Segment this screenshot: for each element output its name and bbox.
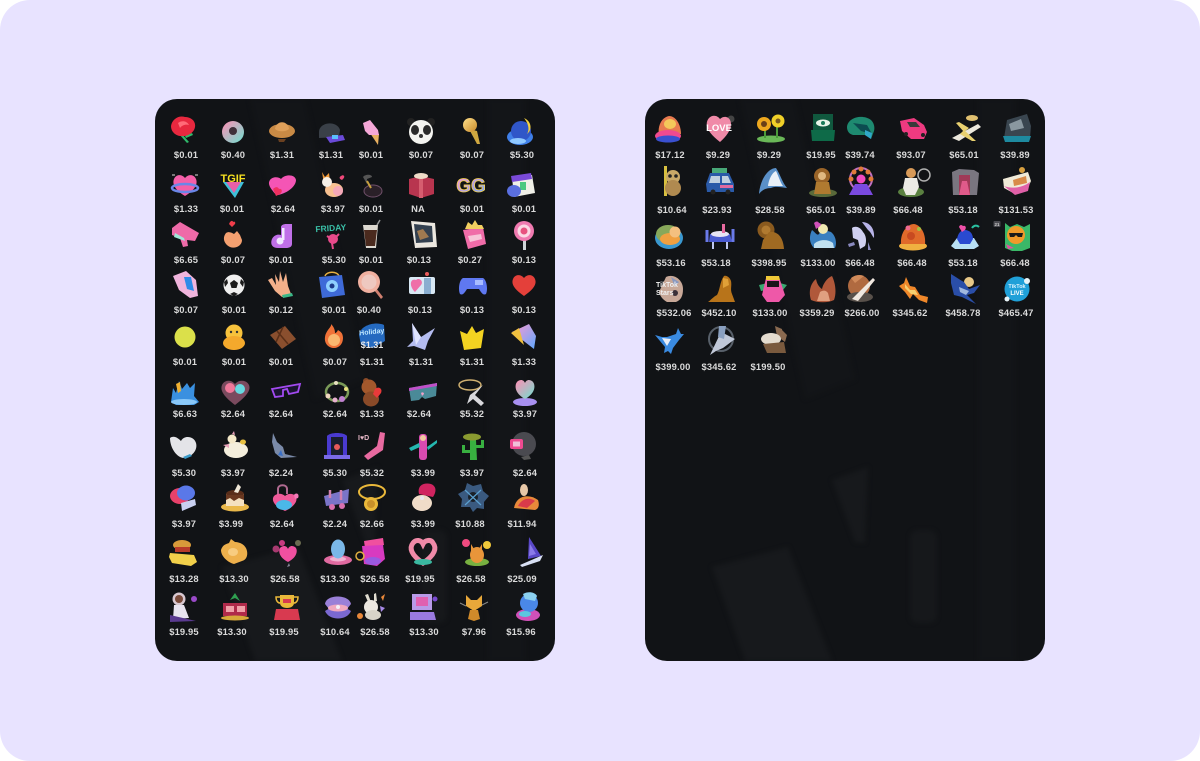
gift: dark island: $39.89 (1000, 149, 1030, 160)
gift: green cactus (451, 430, 495, 479)
gift: TGIF sticker (220, 173, 246, 214)
gift: clam shell: $10.64 (320, 626, 350, 637)
gift: GG letters (456, 176, 486, 214)
gift: white whale: $28.58 (755, 204, 785, 215)
gift: globe pedestal: $13.30 (320, 573, 350, 584)
gift: Holiday sticker with price overlay: $1.31 (361, 340, 383, 350)
gift: TikTok Live globe: LIVE (1010, 291, 1024, 297)
gift: stone gate: $53.18 (948, 204, 978, 215)
gift: dark island (995, 112, 1039, 161)
gift: lion man (801, 166, 845, 216)
gift: yellow chick (222, 324, 246, 367)
gift: pink phone with text (351, 430, 395, 479)
gift: blue figure: $15.96 (506, 626, 536, 637)
gift: flame (323, 324, 347, 367)
gift: purple sailboat (507, 536, 551, 585)
gift: corgi in pool: $53.16 (656, 257, 686, 268)
gift: chocolate (269, 326, 296, 367)
gift: teal helmet (839, 112, 883, 161)
gift: blue speaker: $0.01 (322, 304, 346, 315)
gift: girl on orange float (504, 482, 548, 530)
gift: blue crown flames: $6.63 (173, 408, 197, 419)
gift: sunflowers: $9.29 (757, 149, 781, 160)
gift: girl on orange float: $11.94 (507, 518, 537, 529)
gift: sun with sunglasses and level badge: $66.48 (1000, 257, 1030, 268)
gift: dining table: $53.18 (701, 257, 731, 268)
gift: Love heart (698, 112, 742, 161)
gift: white duck: $3.97 (221, 467, 245, 478)
gift: red trophy: $19.95 (269, 626, 299, 637)
gift: sweet boat (995, 166, 1039, 216)
gift: island with heart (943, 220, 987, 269)
gift: pink phone with text: $5.32 (360, 467, 384, 478)
gift: music note badge: $0.01 (269, 254, 293, 265)
gift: pink inflatable man: $3.99 (411, 467, 435, 478)
gift: manta bird (261, 430, 305, 479)
gift: TikTok Stars skull: $532.06 (657, 307, 691, 318)
gift: orange flower bed (891, 220, 935, 269)
gift: flower wreath (315, 376, 359, 420)
gift: ferris wheel (839, 166, 883, 216)
gift: pink love hearts: $2.64 (271, 203, 295, 214)
gift: airplane (944, 112, 988, 161)
gift: pink phone with text: I♥D (358, 435, 369, 442)
gift: heart on pedestal: $3.97 (513, 408, 537, 419)
gift: white whale (750, 166, 794, 216)
gift: neon sunglasses (264, 376, 308, 420)
gift: TikTok Live globe: $465.47 (999, 307, 1033, 318)
gift: white bunny (350, 591, 394, 638)
gift: golden pumpkin: $13.30 (219, 573, 249, 584)
gift: photo print (407, 221, 437, 265)
gift: pink and white heart box (408, 272, 435, 315)
gift: sun with sunglasses and level badge (995, 220, 1039, 269)
gift: seal and moon (800, 220, 844, 269)
gift: crystal gem: $0.07 (174, 304, 198, 315)
gift: red present (409, 173, 434, 214)
gift: teal helmet: $39.74 (845, 149, 875, 160)
gift: moon: $5.30 (510, 149, 534, 160)
gift: pink sports car (891, 112, 935, 161)
gift: fire phoenix (891, 273, 935, 319)
gift: red present: NA (411, 203, 425, 214)
gift: pegasus (840, 220, 884, 269)
gift: pink and white heart box: $0.13 (408, 304, 432, 315)
gift: lollipop (512, 221, 536, 265)
gift: two-tone heart: $2.64 (221, 408, 245, 419)
gift: silver chain: $5.32 (460, 408, 484, 419)
gift: music note badge (269, 224, 293, 265)
gift: brown rabbit (751, 324, 795, 373)
gift: Friday sticker: $5.30 (322, 254, 346, 265)
gift: teddy bear with heart (350, 376, 394, 420)
gift: yellow burger car: $13.28 (169, 573, 199, 584)
gift: Holiday sticker with price overlay: Holiday (359, 328, 385, 337)
gift: iced drink (359, 220, 383, 265)
gift: brown rabbit: $199.50 (751, 361, 785, 372)
gift: blue figure (506, 591, 550, 638)
gift: blue fireworks (451, 482, 495, 530)
gift: palm cake (213, 591, 257, 638)
gift: photo print: $0.13 (407, 254, 431, 265)
gift: bumper car: $17.12 (655, 149, 685, 160)
gift: golden lion (699, 273, 743, 319)
gift: gold necklace: $2.66 (360, 518, 384, 529)
gift: brown lion (749, 220, 793, 269)
gift: fire phoenix: $345.62 (893, 307, 927, 318)
gift: yellow crown (460, 326, 484, 367)
gift: Holiday sticker with price overlay: $1.31 (360, 356, 384, 367)
gift: Friday sticker: FRIDAY (315, 222, 347, 234)
gift: sunflowers (749, 112, 793, 161)
gift: soccer ball (222, 274, 246, 315)
gift: dining table (698, 220, 742, 269)
gift: corgi: $3.97 (321, 203, 345, 214)
gift: ski goggles (401, 376, 445, 420)
gift: pink love hearts (268, 175, 296, 214)
gift: pink heart with ring: $1.33 (174, 203, 198, 214)
gift: bronze dragon (801, 273, 845, 319)
gift: bronze dragon: $359.29 (800, 307, 834, 318)
gift: pink popcorn box (458, 220, 486, 265)
gift: stone gate (943, 166, 987, 216)
gift: pink ticket box: $6.65 (174, 254, 198, 265)
gift: astronaut with ring: $66.48 (893, 204, 923, 215)
gift: tennis ball (173, 326, 197, 367)
gift: heart bouquet: $26.58 (270, 573, 300, 584)
gift: TikTok Stars skull: Stars (656, 290, 674, 297)
gift: orange flower bed: $66.48 (897, 257, 927, 268)
gift: boxing gloves (161, 482, 205, 530)
gift: music note train: $2.24 (323, 518, 347, 529)
gift: astronaut with ring (891, 166, 935, 216)
gift: orange fox (452, 591, 496, 638)
gift: sweet boat: $131.53 (999, 204, 1033, 215)
gift: palm cake: $13.30 (217, 626, 247, 637)
gift: panda (407, 118, 435, 160)
gift: white fluffy dog (162, 430, 206, 479)
gift: heart wreath (401, 536, 445, 585)
gift: sloth: $10.64 (657, 204, 687, 215)
gift: pink inflatable man (401, 430, 445, 479)
gift: flower wreath: $2.64 (323, 408, 347, 419)
gift: red heart: $0.13 (512, 304, 536, 315)
gift: rose: $0.01 (174, 149, 198, 160)
gift: white duck (213, 430, 257, 479)
gift: lion man: $65.01 (806, 204, 836, 215)
gift: paper crane: $1.31 (409, 356, 433, 367)
gift: ski goggles: $2.64 (407, 408, 431, 419)
gift: ferris wheel: $39.89 (846, 204, 876, 215)
panel: gift prices, left (155, 99, 555, 661)
gift: red ring box (401, 482, 445, 530)
gift: baseball cap: $1.31 (319, 149, 343, 160)
gift: Holiday sticker with price overlay (359, 324, 385, 367)
gift: cowboy hat (269, 122, 295, 160)
gift: dark hair ornament: $0.01 (359, 203, 383, 214)
gift: pink ice cream: $0.01 (359, 149, 383, 160)
gift: heart on pedestal (503, 376, 547, 420)
gift: rainbow cone (511, 324, 536, 367)
gift: moon (507, 118, 534, 160)
gift: chocolate: $0.01 (269, 356, 293, 367)
gift: corgi in pool (647, 220, 691, 269)
gift: airplane: $65.01 (949, 149, 979, 160)
gift: green cactus: $3.97 (460, 467, 484, 478)
gift: music note train (315, 482, 359, 530)
gift: GG letters: GG (456, 176, 486, 197)
gift: white fluffy dog: $5.30 (172, 467, 196, 478)
gift: paper crane (407, 323, 435, 367)
gift: GG letters: $0.01 (460, 203, 484, 214)
gift: pink convertible (750, 273, 794, 319)
gift: dark hair ornament (359, 174, 383, 214)
gift: yellow chick: $0.01 (222, 356, 246, 367)
gift: pegasus: $66.48 (845, 257, 875, 268)
gift: green ring box (801, 112, 845, 161)
gift: boxing gloves: $3.97 (172, 518, 196, 529)
gift: waving hand: $0.12 (269, 304, 293, 315)
gift: retro computer (401, 591, 445, 638)
gift: waving hand (268, 271, 293, 315)
gift: hand mirror (357, 271, 383, 315)
gift: TikTok Live globe (995, 273, 1039, 319)
gift: Love heart: $9.29 (706, 149, 730, 160)
gift: dark head with pink visor (501, 430, 545, 479)
gift: tennis ball: $0.01 (173, 356, 197, 367)
gift: planet with sword: $266.00 (845, 307, 879, 318)
gift: donut (221, 121, 245, 160)
gift: rainbow cone: $1.33 (512, 356, 536, 367)
gift: bumper car (647, 112, 691, 161)
gift: gold necklace (350, 482, 394, 530)
gift: TikTok Stars skull (648, 273, 692, 319)
gift: pink popcorn box: $0.27 (458, 254, 482, 265)
gift: finger heart: $0.07 (221, 254, 245, 265)
gift: TikTok Stars skull: TikTok (656, 282, 678, 289)
gift: heart bouquet (265, 536, 309, 585)
gift: crystal gem (173, 271, 198, 315)
gift: red heart (512, 275, 536, 315)
gift: red ring box: $3.99 (411, 518, 435, 529)
gift: retro computer: $13.30 (409, 626, 439, 637)
gift: finger heart (221, 220, 245, 265)
gift: chocolate cake (213, 482, 257, 530)
gift: blue whale with moon: $458.78 (946, 307, 980, 318)
gift: corgi (321, 172, 345, 214)
gift: pink ice cream (359, 120, 383, 160)
gift: pink convertible: $133.00 (753, 307, 787, 318)
gift: lollipop: $0.13 (512, 254, 536, 265)
gift: silver angel (700, 324, 744, 373)
gift: globe pedestal (317, 536, 361, 585)
gift: hand mirror: $0.40 (357, 304, 381, 315)
gift: calendar: $0.01 (512, 203, 536, 214)
gift: heart padlock: $2.64 (270, 518, 294, 529)
gift: pink handbag (350, 536, 394, 585)
gift: donut: $0.40 (221, 149, 245, 160)
gift: TGIF sticker: TGIF (220, 173, 246, 185)
gift: pink handbag: $26.58 (360, 573, 390, 584)
gift: heart wreath: $19.95 (405, 573, 435, 584)
gift: silver angel: $345.62 (702, 361, 736, 372)
gift: sun with sunglasses and level badge: 21 (994, 222, 1000, 227)
gift: seal and moon: $133.00 (801, 257, 835, 268)
gift: island with heart: $53.18 (948, 257, 978, 268)
gift: blue crown flames (162, 376, 206, 420)
gift: manta bird: $2.24 (269, 467, 293, 478)
gift: pink sports car: $93.07 (896, 149, 926, 160)
gift: blue speaker (319, 272, 346, 315)
gift: blue bus: $23.93 (702, 204, 732, 215)
gift: gold ice cream: $0.07 (460, 149, 484, 160)
gift: blue gamepad: $0.13 (460, 304, 484, 315)
gift: heart padlock (264, 482, 308, 530)
gift: clam shell (316, 591, 360, 638)
gift: blue gamepad (459, 278, 487, 315)
gift: yellow burger car (161, 536, 205, 585)
gift: rose (171, 116, 198, 160)
gift: iced drink: $0.01 (359, 254, 383, 265)
gift: purple gate: $5.30 (323, 467, 347, 478)
gift: pink heart with ring (170, 174, 200, 214)
gift: soccer ball: $0.01 (222, 304, 246, 315)
gift: white bunny: $26.58 (360, 626, 390, 637)
gift: corgi with balloons (454, 536, 498, 585)
gift: purple gate (315, 430, 359, 479)
gift: teddy bear with heart: $1.33 (360, 408, 384, 419)
gift: golden pumpkin (212, 536, 256, 585)
gift: corgi with balloons: $26.58 (456, 573, 486, 584)
gift: neon sunglasses: $2.64 (269, 408, 293, 419)
gift: silver chain (451, 376, 495, 420)
gift: baseball cap (319, 123, 345, 160)
gift: panda: $0.07 (409, 149, 433, 160)
gift: golden lion: $452.10 (702, 307, 736, 318)
gift: Love heart: LOVE (706, 123, 732, 134)
gift: blue dolphin (647, 324, 691, 373)
gift: flame: $0.07 (323, 356, 347, 367)
gift: brown lion: $398.95 (752, 257, 786, 268)
gift: astronaut girl: $19.95 (169, 626, 199, 637)
gift: TikTok Live globe: TikTok (1008, 284, 1027, 290)
gift: dark head with pink visor: $2.64 (513, 467, 537, 478)
gift: cowboy hat: $1.31 (270, 149, 294, 160)
gift: TGIF sticker: $0.01 (220, 203, 244, 214)
gift: purple sailboat: $25.09 (507, 573, 537, 584)
gift: pink ticket box (172, 222, 199, 265)
gift: gold ice cream (460, 118, 484, 160)
gift: planet with sword (840, 273, 884, 319)
gift: blue dolphin: $399.00 (656, 361, 690, 372)
gift: chocolate cake: $3.99 (219, 518, 243, 529)
gift: sloth (649, 166, 693, 216)
gift: astronaut girl (161, 591, 205, 638)
gift: Friday sticker (315, 222, 347, 265)
gift: yellow crown: $1.31 (460, 356, 484, 367)
gift: red trophy (265, 591, 309, 638)
gift: two-tone heart (213, 376, 257, 420)
gift: calendar (507, 173, 536, 214)
gift: orange fox: $7.96 (462, 626, 486, 637)
gift: blue whale with moon (943, 273, 987, 319)
gift: blue fireworks: $10.88 (455, 518, 485, 529)
gift: green ring box: $19.95 (806, 149, 836, 160)
gift: blue bus (698, 166, 742, 216)
panel: gift prices, right (645, 99, 1045, 661)
